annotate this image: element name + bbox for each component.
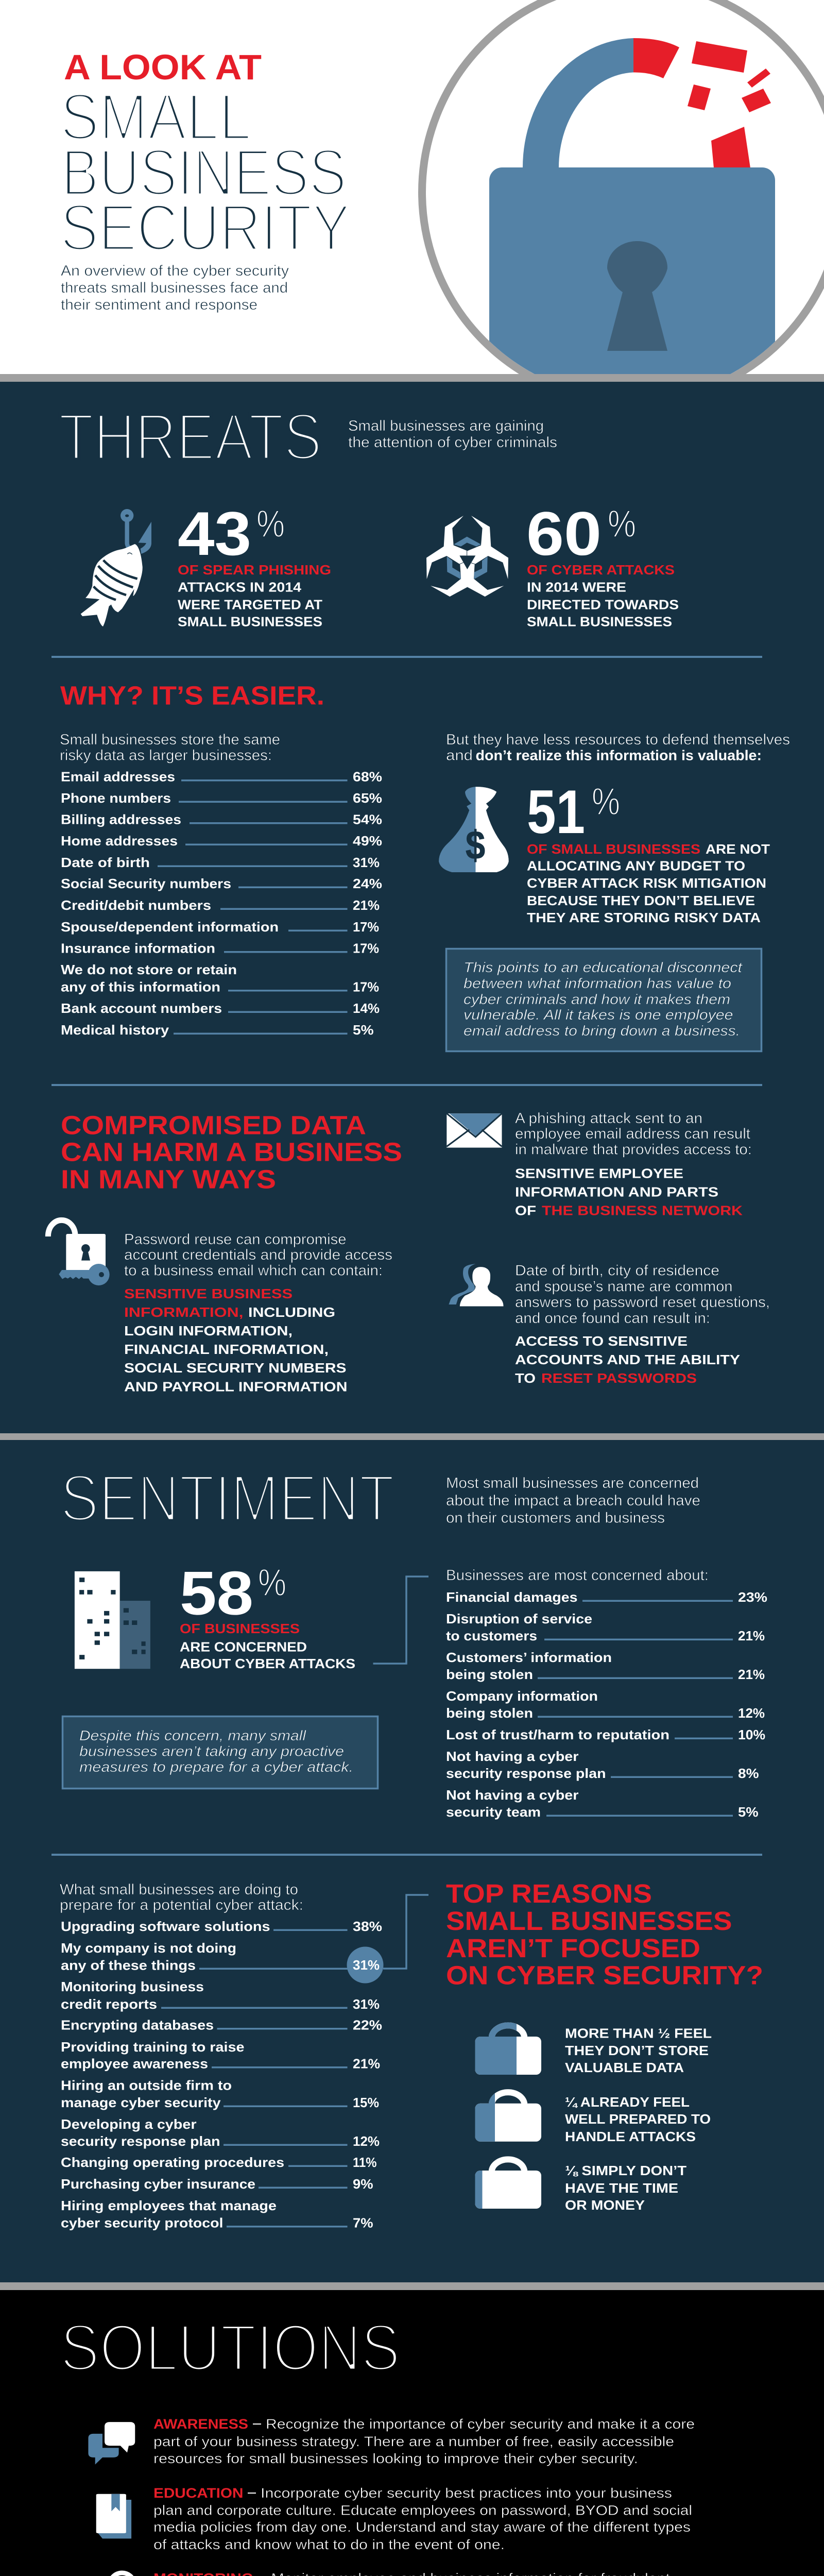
- row: medical history: Medical history: [61, 1022, 169, 1038]
- row: email addresses: [61, 769, 382, 784]
- callout: educational disconnect: vulnerable. All it takes is one employee: [464, 1007, 733, 1023]
- panel: threats: [0, 382, 824, 1433]
- row: home addresses: 49%: [353, 833, 382, 849]
- text: password reuse: AND PAYROLL INFORMATION: [124, 1379, 347, 1394]
- stat: 43% spear phishing: ATTACKS IN 2014: [178, 579, 302, 595]
- row: monitoring credit reports: credit reports: [61, 1996, 157, 2012]
- title: A LOOK AT: [64, 47, 262, 87]
- row: upgrading software: 38%: [353, 1919, 382, 1934]
- chart: data stored list: [61, 769, 382, 1038]
- solution: education: [153, 2485, 692, 2552]
- stat: 51% no budget: OF SMALL BUSINESSES: [527, 841, 700, 857]
- row: operating procedures: 11%: [353, 2155, 377, 2170]
- heading: top reasons: SMALL BUSINESSES: [446, 1906, 732, 1936]
- callout: educational disconnect: cyber criminals and how it makes them: [464, 991, 730, 1007]
- reason: don't store valuable data: VALUABLE DATA: [565, 2060, 684, 2075]
- callout: lack of proactive measures: measures to prepare for a cyber attack.: [79, 1759, 353, 1775]
- sentiment intro: [446, 1475, 700, 1526]
- row: date of birth: [61, 855, 380, 870]
- row: not doing anything (highlighted): [61, 1940, 383, 1984]
- row: cyber insurance: Purchasing cyber insurance: [61, 2176, 255, 2192]
- text: password reset answers: RESET PASSWORDS: [541, 1370, 697, 1386]
- row: response plan: Developing a cyber: [61, 2116, 197, 2132]
- icon: hooked fish: [81, 509, 151, 626]
- heading: compromised data: COMPROMISED DATA: [61, 1111, 366, 1140]
- icon: lock half blue: [475, 2025, 541, 2075]
- row: response plan: security response plan: [61, 2133, 220, 2149]
- row: outside firm: [61, 2077, 379, 2110]
- text: password reset answers: answers to password reset questions,: [515, 1294, 770, 1311]
- row: no response plan: [446, 1749, 759, 1781]
- reason: don't store valuable data: MORE THAN ½ FEEL: [565, 2026, 712, 2041]
- stat: 51% no budget: THEY ARE STORING RISKY DATA: [527, 910, 761, 925]
- callout: educational disconnect: This points to an educational disconnect: [464, 959, 743, 975]
- text: risky data intro: risky data as larger businesses:: [60, 747, 272, 764]
- reason: don't store valuable data: THEY DON’T STORE: [565, 2043, 709, 2058]
- heading: threats: THREATS: [59, 400, 322, 474]
- row: bank account numbers: [61, 1001, 380, 1016]
- heading: solutions: SOLUTIONS: [60, 2311, 400, 2385]
- text: phishing attack: SENSITIVE EMPLOYEE: [515, 1165, 683, 1181]
- row: social security numbers: 24%: [353, 876, 382, 891]
- sentiment intro: Most small businesses are concerned: [446, 1475, 699, 1492]
- row: encrypting databases: Encrypting databases: [61, 2018, 214, 2033]
- icon: biohazard: [426, 516, 508, 597]
- text: phishing attack: A phishing attack sent to an: [515, 1110, 702, 1127]
- text: phishing attack: THE BUSINESS NETWORK: [542, 1202, 743, 1218]
- row: email addresses: 68%: [353, 769, 382, 784]
- heading: why it's easier: WHY? IT’S EASIER.: [60, 681, 324, 710]
- heading: compromised data: IN MANY WAYS: [61, 1164, 276, 1194]
- stat: 58% of businesses: OF BUSINESSES: [180, 1621, 300, 1636]
- row: cyber insurance: 9%: [353, 2176, 373, 2192]
- row: financial damages: [446, 1589, 767, 1605]
- row: encrypting databases: 22%: [353, 2018, 382, 2033]
- stat: 43% spear phishing: %: [256, 502, 285, 545]
- row: credit/debit numbers: 21%: [353, 897, 380, 913]
- subtitle: their sentiment and response: [61, 297, 258, 313]
- row: no security team: Not having a cyber: [446, 1787, 579, 1803]
- reason: no time or money: OR MONEY: [565, 2197, 645, 2213]
- reason: don't store valuable data: [565, 2026, 712, 2075]
- row: training: 21%: [353, 2056, 380, 2071]
- stat: 51% no budget: 51: [527, 777, 585, 846]
- icon: lock eighth blue: [475, 2159, 541, 2209]
- row: do not store: [61, 962, 379, 994]
- row: lost trust: Lost of trust/harm to reputation: [446, 1727, 670, 1742]
- title: [60, 47, 350, 265]
- stat: 51% no budget: ALLOCATING ANY BUDGET TO: [527, 858, 745, 874]
- row: disruption of service: Disruption of service: [446, 1611, 592, 1626]
- text: password reuse: account credentials and provide access: [124, 1247, 392, 1263]
- text: password reset answers: Date of birth, city of residence: [515, 1262, 719, 1279]
- row: no response plan: 8%: [738, 1766, 759, 1781]
- row: billing addresses: Billing addresses: [61, 812, 181, 827]
- icon: money bag: $: [466, 822, 485, 868]
- row: company information stolen: [446, 1688, 765, 1721]
- row: response plan: [61, 2116, 380, 2149]
- heading: compromised data: [61, 1111, 402, 1194]
- text: password reset answers: ACCOUNTS AND THE ABILITY: [515, 1352, 740, 1367]
- row: phone numbers: Phone numbers: [61, 790, 171, 806]
- text: password reuse: to a business email which can contain:: [124, 1262, 383, 1279]
- stat: 58% of businesses: [180, 1559, 355, 1671]
- stat: 51% no budget: [527, 777, 770, 925]
- threats intro: the attention of cyber criminals: [348, 434, 557, 451]
- row: billing addresses: [61, 812, 382, 827]
- row: customers' information stolen: Customers’ information: [446, 1650, 612, 1665]
- row: hiring employees: [61, 2198, 373, 2231]
- stat: 43% spear phishing: SMALL BUSINESSES: [178, 614, 322, 630]
- solution: awareness: AWARENESS: [153, 2416, 248, 2432]
- stat: 51% no budget: CYBER ATTACK RISK MITIGATION: [527, 875, 766, 891]
- heading: top reasons: AREN’T FOCUSED: [446, 1934, 700, 1963]
- row: no response plan: Not having a cyber: [446, 1749, 579, 1764]
- row: bank account numbers: 14%: [353, 1001, 380, 1016]
- row: do not store: 17%: [353, 979, 379, 994]
- row: spouse/dependent information: 17%: [353, 919, 379, 935]
- row: cyber insurance: [61, 2176, 373, 2192]
- solution: education: plan and corporate culture. Educate employees on password, BYOD and social: [153, 2503, 692, 2518]
- heading: compromised data: CAN HARM A BUSINESS: [61, 1138, 402, 1166]
- callout: lack of proactive measures: businesses aren’t taking any proactive: [79, 1743, 344, 1759]
- row: social security numbers: Social Security numbers: [61, 876, 231, 891]
- solution: awareness: part of your business strategy. There are a number of free, easily accessible: [153, 2434, 674, 2449]
- callout: educational disconnect: email address to bring down a business.: [464, 1023, 740, 1039]
- row: operating procedures: Changing operating procedures: [61, 2155, 284, 2170]
- row: not doing anything (highlighted): 31%: [353, 1957, 380, 1973]
- row: upgrading software: [61, 1919, 382, 1934]
- row: upgrading software: Upgrading software solutions: [61, 1919, 270, 1934]
- row: encrypting databases: [61, 2018, 382, 2033]
- row: medical history: 5%: [353, 1022, 374, 1038]
- solution: education: media policies from day one. Understand and stay aware of the different types: [153, 2519, 691, 2535]
- arrow: connector to top reasons: [383, 1895, 428, 1969]
- reason: already prepared: WELL PREPARED TO: [565, 2111, 711, 2127]
- row: company information stolen: Company information: [446, 1688, 598, 1704]
- row: home addresses: Home addresses: [61, 833, 178, 849]
- text: fewer resources: [446, 732, 790, 764]
- stat: 43% spear phishing: WERE TARGETED AT: [178, 597, 322, 612]
- row: training: [61, 2039, 380, 2071]
- text: password reuse: [124, 1231, 392, 1394]
- title: BUSINESS: [61, 136, 347, 210]
- callout: lack of proactive measures: [63, 1717, 378, 1789]
- text: password reuse: INFORMATION,: [124, 1304, 243, 1320]
- solution: awareness: [153, 2416, 695, 2466]
- text: password reset answers: and spouse’s name are common: [515, 1279, 732, 1295]
- stat: 43% spear phishing: 43: [178, 499, 251, 568]
- row: training: employee awareness: [61, 2056, 208, 2071]
- row: billing addresses: 54%: [353, 812, 382, 827]
- row: no security team: security team: [446, 1804, 541, 1820]
- reason: already prepared: HANDLE ATTACKS: [565, 2129, 696, 2144]
- text: preparation intro: prepare for a potential cyber attack:: [60, 1897, 303, 1913]
- solution: education: of attacks and know what to do in the event of one.: [153, 2537, 505, 2552]
- reason: no time or money: [565, 2163, 686, 2213]
- row: customers' information stolen: [446, 1650, 765, 1682]
- stat: 58% of businesses: ABOUT CYBER ATTACKS: [180, 1656, 355, 1671]
- threats intro: [348, 418, 557, 451]
- stat: 51% no budget: %: [592, 780, 620, 823]
- row: not doing anything (highlighted): any of these things: [61, 1958, 196, 1973]
- text: preparation intro: What small businesses are doing to: [60, 1882, 298, 1898]
- row: medical history: [61, 1022, 374, 1038]
- text: risky data intro: [60, 732, 280, 764]
- row: insurance information: Insurance information: [61, 941, 215, 956]
- row: no security team: [446, 1787, 758, 1820]
- text: fewer resources: don’t realize this information is valuable:: [476, 747, 762, 764]
- text: phishing attack: in malware that provides access to:: [515, 1142, 752, 1158]
- title: SMALL: [60, 80, 251, 154]
- threats intro: Small businesses are gaining: [348, 418, 544, 434]
- callout: educational disconnect: [446, 949, 761, 1051]
- row: phone numbers: [61, 790, 382, 806]
- heading: top reasons: TOP REASONS: [446, 1879, 652, 1908]
- solution: education: EDUCATION: [153, 2485, 243, 2501]
- row: date of birth: Date of birth: [61, 855, 150, 870]
- icon: office buildings: [75, 1571, 150, 1669]
- row: hiring employees: Hiring employees that manage: [61, 2198, 277, 2213]
- chart: top concerns list: [446, 1567, 767, 1820]
- row: outside firm: manage cyber security: [61, 2095, 221, 2110]
- stat: 43% spear phishing: OF SPEAR PHISHING: [178, 562, 331, 578]
- row: date of birth: 31%: [353, 855, 380, 870]
- sentiment intro: on their customers and business: [446, 1510, 665, 1526]
- reason: no time or money: HAVE THE TIME: [565, 2180, 678, 2196]
- icon: open lock and key: [48, 1220, 110, 1285]
- row: bank account numbers: Bank account numbers: [61, 1001, 222, 1016]
- arrow: connector to concerns: [373, 1577, 428, 1664]
- heading: sentiment: SENTIMENT: [60, 1462, 394, 1535]
- text: password reuse: LOGIN INFORMATION,: [124, 1323, 293, 1338]
- row: customers' information stolen: being stolen: [446, 1667, 533, 1682]
- heading: top reasons: ON CYBER SECURITY?: [446, 1961, 763, 1990]
- stat: 51% no budget: BECAUSE THEY DON’T BELIEVE: [527, 893, 755, 908]
- icon: speech bubbles: [88, 2422, 135, 2465]
- row: operating procedures: [61, 2155, 377, 2170]
- row: do not store: We do not store or retain: [61, 962, 237, 977]
- sentiment intro: about the impact a breach could have: [446, 1493, 700, 1509]
- row: hiring employees: cyber security protocol: [61, 2215, 224, 2231]
- solution: awareness: resources for small businesses looking to improve their cyber security.: [153, 2451, 638, 2466]
- callout: educational disconnect: between what information has value to: [464, 975, 731, 991]
- icon: money bag: [439, 787, 509, 872]
- row: insurance information: [61, 941, 379, 956]
- row: outside firm: 15%: [353, 2095, 379, 2110]
- row: do not store: any of this information: [61, 979, 220, 994]
- row: social security numbers: [61, 876, 382, 891]
- text: fewer resources: and: [446, 747, 473, 764]
- title: SECURITY: [60, 191, 350, 265]
- row: credit/debit numbers: [61, 897, 380, 913]
- text: password reset answers: and once found can result in:: [515, 1310, 710, 1327]
- row: phone numbers: 65%: [353, 790, 382, 806]
- text: fewer resources: But they have less resources to defend themselves: [446, 732, 790, 748]
- text: phishing attack: employee email address can result: [515, 1126, 750, 1142]
- row: company information stolen: being stolen: [446, 1705, 533, 1721]
- row: disruption of service: 21%: [738, 1628, 765, 1643]
- text: password reuse: Password reuse can compromise: [124, 1231, 346, 1248]
- text: phishing attack: INFORMATION AND PARTS: [515, 1184, 718, 1199]
- stat: 60% cyber attacks: DIRECTED TOWARDS: [527, 597, 679, 612]
- subtitle: [61, 263, 289, 313]
- row: spouse/dependent information: Spouse/dependent information: [61, 919, 279, 935]
- text: password reuse: INCLUDING: [248, 1304, 335, 1320]
- stat: 60% cyber attacks: OF CYBER ATTACKS: [527, 562, 675, 578]
- stat: 51% no budget: ARE NOT: [706, 841, 770, 857]
- stat: 58% of businesses: %: [258, 1561, 286, 1604]
- row: training: Providing training to raise: [61, 2039, 244, 2055]
- reason: already prepared: [565, 2094, 711, 2144]
- row: email addresses: Email addresses: [61, 769, 175, 784]
- row: customers' information stolen: 21%: [738, 1667, 765, 1682]
- stat: 58% of businesses: 58: [180, 1559, 253, 1628]
- text: password reuse: SOCIAL SECURITY NUMBERS: [124, 1360, 346, 1376]
- row: monitoring credit reports: [61, 1979, 380, 2012]
- icon: person silhouette: [449, 1264, 504, 1306]
- icon: magnifying glass: [94, 2573, 135, 2576]
- stat: 60% cyber attacks: 60: [526, 499, 602, 568]
- row: outside firm: Hiring an outside firm to: [61, 2077, 232, 2093]
- reason: already prepared: ¼ ALREADY FEEL: [565, 2094, 690, 2110]
- icon: lock quarter blue: [475, 2092, 541, 2142]
- row: response plan: 12%: [353, 2133, 380, 2149]
- text: phishing attack: OF: [515, 1202, 536, 1218]
- stat: 43% spear phishing: [178, 499, 331, 630]
- row: monitoring credit reports: Monitoring business: [61, 1979, 204, 1994]
- illustration: broken padlock: [422, 0, 824, 403]
- row: no response plan: security response plan: [446, 1766, 606, 1781]
- row: spouse/dependent information: [61, 919, 379, 935]
- icon: book: [96, 2494, 131, 2538]
- chart: preparation list: [61, 1919, 383, 2231]
- row: not doing anything (highlighted): My company is not doing: [61, 1940, 236, 1956]
- panel: header: [0, 0, 824, 403]
- row: no security team: 5%: [738, 1804, 758, 1820]
- row: credit/debit numbers: Credit/debit numbers: [61, 897, 211, 913]
- chart: top concerns list: Businesses are most concerned about:: [446, 1567, 709, 1584]
- stat: 60% cyber attacks: SMALL BUSINESSES: [527, 614, 672, 630]
- stat: 60% cyber attacks: [526, 499, 679, 630]
- row: monitoring credit reports: 31%: [353, 1996, 380, 2012]
- icon: envelope: [447, 1113, 502, 1148]
- stat: 60% cyber attacks: %: [608, 502, 636, 545]
- text: password reset answers: [515, 1262, 770, 1386]
- row: lost trust: 10%: [738, 1727, 765, 1742]
- text: password reset answers: TO: [515, 1370, 536, 1386]
- row: insurance information: 17%: [353, 941, 379, 956]
- reason: no time or money: ⅛ SIMPLY DON’T: [565, 2163, 686, 2178]
- callout: lack of proactive measures: Despite this concern, many small: [79, 1727, 306, 1743]
- stat: 58% of businesses: ARE CONCERNED: [180, 1639, 307, 1655]
- row: hiring employees: 7%: [353, 2215, 373, 2231]
- row: company information stolen: 12%: [738, 1705, 765, 1721]
- text: preparation intro: [60, 1882, 303, 1913]
- row: lost trust: [446, 1727, 765, 1742]
- row: home addresses: [61, 833, 382, 849]
- row: disruption of service: [446, 1611, 765, 1643]
- text: password reuse: FINANCIAL INFORMATION,: [124, 1342, 329, 1357]
- subtitle: threats small businesses face and: [61, 280, 288, 296]
- text: risky data intro: Small businesses store the same: [60, 732, 280, 748]
- panel: sentiment: [0, 1440, 824, 2282]
- stat: 60% cyber attacks: IN 2014 WERE: [527, 579, 626, 595]
- panel: solutions: [0, 2290, 824, 2576]
- row: disruption of service: to customers: [446, 1628, 537, 1643]
- text: password reuse: SENSITIVE BUSINESS: [124, 1286, 293, 1301]
- text: phishing attack: [515, 1110, 752, 1218]
- solution: awareness: Recognize the importance of cyber security and make it a core: [266, 2416, 695, 2432]
- row: financial damages: Financial damages: [446, 1589, 578, 1605]
- solution: education: Incorporate cyber security best practices into your business: [261, 2485, 672, 2501]
- heading: top reasons: [446, 1879, 763, 1990]
- subtitle: An overview of the cyber security: [61, 263, 289, 279]
- solution: monitoring: [153, 2571, 671, 2576]
- text: password reset answers: ACCESS TO SENSITIVE: [515, 1333, 688, 1349]
- row: financial damages: 23%: [738, 1589, 767, 1605]
